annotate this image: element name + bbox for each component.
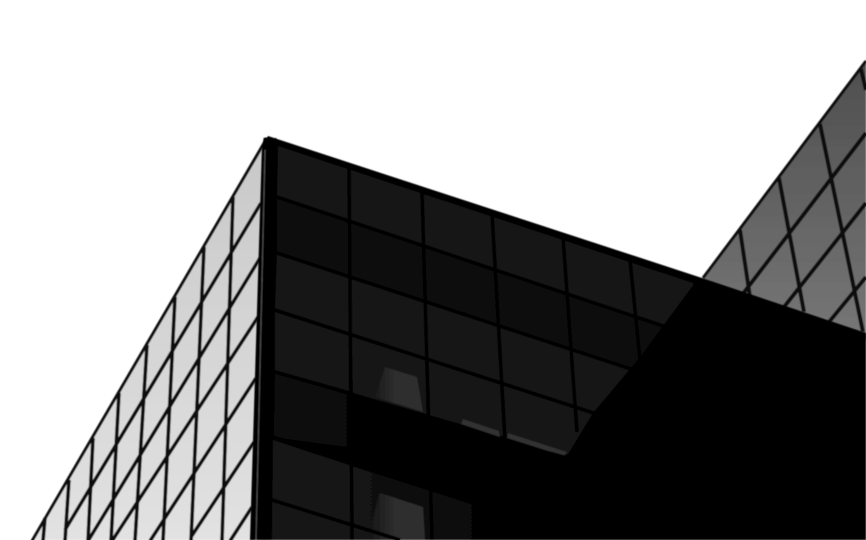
- dark right face of main building: [250, 136, 866, 540]
- left glass face of main building: [32, 136, 268, 540]
- window reflection lower: [368, 493, 425, 540]
- black shadow wedge: [490, 280, 866, 540]
- mullions on right face: [260, 138, 694, 540]
- window reflection upper: [375, 367, 423, 412]
- shadow band across windows: [353, 393, 567, 510]
- window rows on right face: [272, 146, 693, 540]
- sunlit strips: [461, 419, 567, 456]
- corner post highlight: [256, 150, 265, 540]
- distant building at right: [702, 60, 866, 340]
